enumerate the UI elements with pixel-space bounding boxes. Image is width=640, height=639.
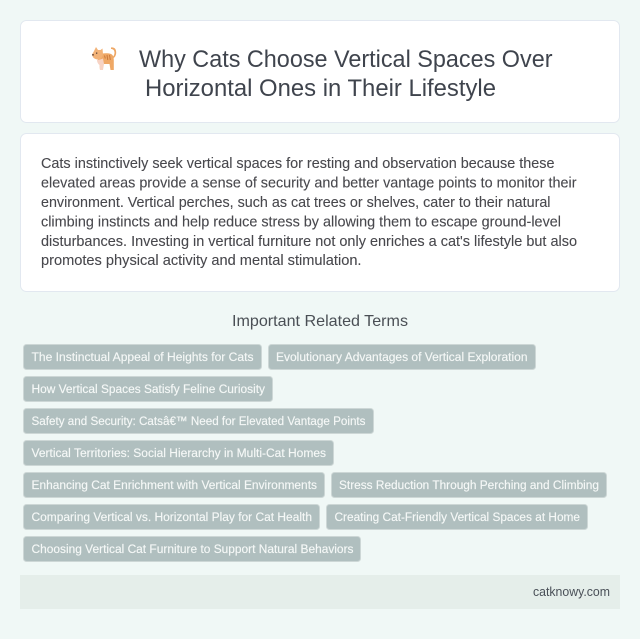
tag: cat enrichment: Enhancing Cat Enrichment with Vertical Environments	[32, 478, 317, 492]
panel: title header	[20, 20, 620, 122]
panel: introduction text	[20, 134, 620, 292]
tag: stress reduction: Stress Reduction Through Perching and Climbing	[339, 478, 599, 492]
panel: introduction text: disturbances. Investing in vertical furniture not only enriches a cat's lifestyle but also	[41, 234, 577, 250]
tag: feline curiosity	[24, 376, 272, 402]
tag: stress reduction	[332, 472, 606, 498]
tag: vertical territories	[24, 440, 334, 466]
footer source text: catknowy.com	[533, 585, 610, 599]
panel: introduction text: environment. Vertical perches, such as cat trees or shelves, cater to their natural	[41, 195, 550, 211]
panel: introduction text: promotes physical activity and mental stimulation.	[41, 253, 362, 269]
tag: comparing play	[24, 504, 320, 530]
tag: choosing furniture: Choosing Vertical Cat Furniture to Support Natural Behaviors	[32, 542, 354, 556]
panel: introduction text: climbing instincts and help reduce stress by allowing them to escape ground-level	[41, 214, 561, 230]
tag: evolutionary advantages: Evolutionary Advantages of Vertical Exploration	[276, 350, 528, 364]
tag: instinctual appeal	[24, 344, 262, 370]
tag: choosing furniture	[24, 536, 360, 562]
tag: cat-friendly spaces	[326, 504, 588, 530]
panel: introduction text: elevated areas provide a sense of security and better vantage points to monitor their	[41, 176, 577, 192]
icon: cat	[92, 47, 116, 70]
tag: cat enrichment	[24, 472, 324, 498]
panel: related term tags	[24, 344, 606, 562]
tag: feline curiosity: How Vertical Spaces Satisfy Feline Curiosity	[32, 382, 266, 396]
tag: cat-friendly spaces: Creating Cat-Friendly Vertical Spaces at Home	[334, 510, 580, 524]
title line 2: Horizontal Ones in Their Lifestyle	[145, 75, 496, 102]
tag: vertical territories: Vertical Territories: Social Hierarchy in Multi-Cat Homes	[32, 446, 326, 460]
heading: important related terms: Important Related Terms	[232, 313, 408, 330]
footer	[20, 575, 620, 609]
title line 1: Why Cats Choose Vertical Spaces Over	[139, 46, 553, 73]
tag: comparing play: Comparing Vertical vs. Horizontal Play for Cat Health	[32, 510, 312, 524]
tag: safety and security	[24, 408, 374, 434]
tag: evolutionary advantages	[268, 344, 536, 370]
panel: introduction text: Cats instinctively seek vertical spaces for resting and observation because these	[41, 156, 554, 172]
tag: instinctual appeal: The Instinctual Appeal of Heights for Cats	[32, 350, 254, 364]
tag: safety and security: Safety and Security: Catsâ€™ Need for Elevated Vantage Points	[32, 414, 366, 428]
